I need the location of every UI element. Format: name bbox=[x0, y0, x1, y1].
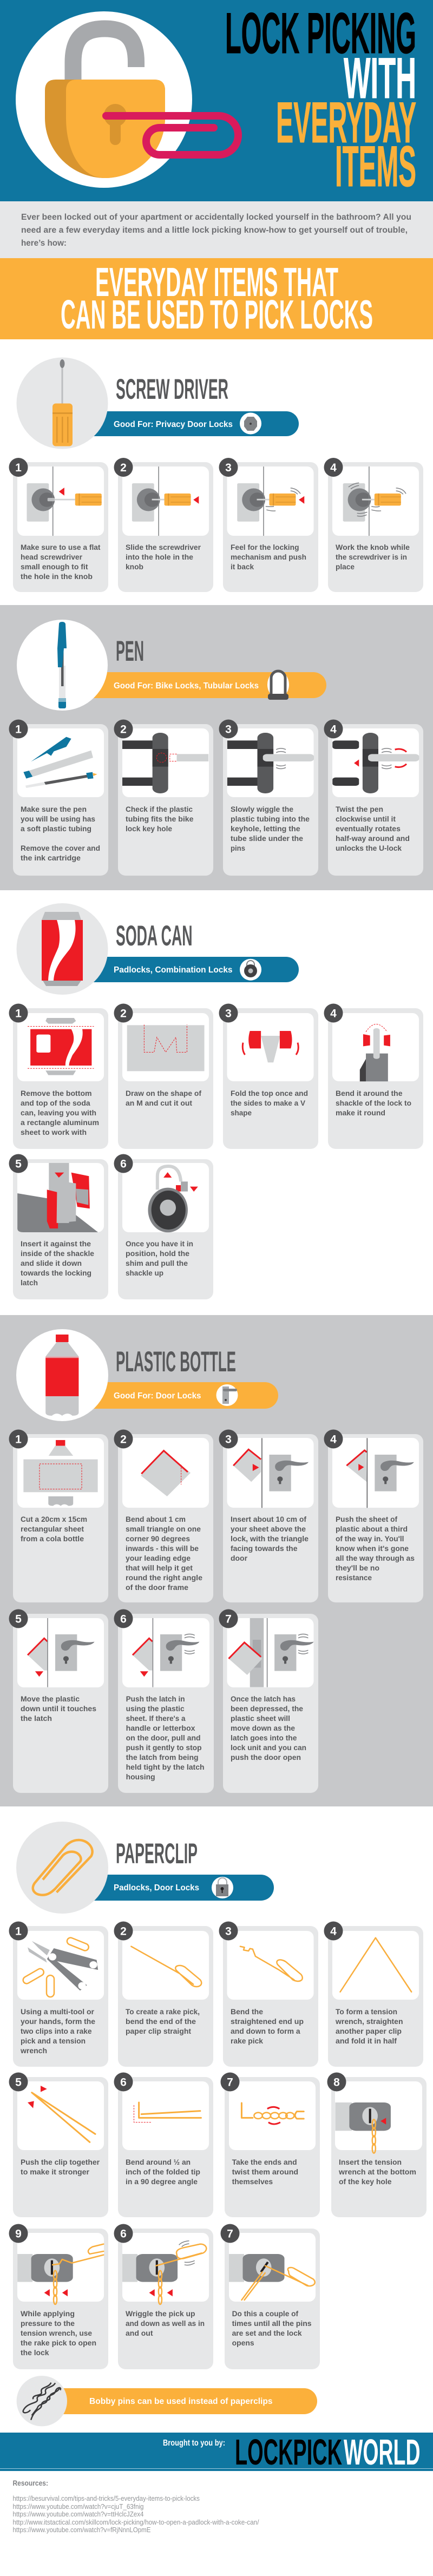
icon: plastic bottle bbox=[16, 1329, 108, 1421]
step 9 bbox=[9, 2224, 108, 2369]
step 5: to make it stronger bbox=[21, 2167, 90, 2176]
step 6: shim and pull the bbox=[126, 1259, 188, 1267]
step 4: shackle of the lock to bbox=[336, 1099, 411, 1107]
step 1: rectangular sheet bbox=[21, 1524, 84, 1533]
heading: SCREW DRIVER bbox=[116, 373, 228, 405]
step 3: Fold the top once and bbox=[231, 1089, 308, 1098]
step 2: paper clip straight bbox=[126, 2027, 191, 2035]
step 5 bbox=[9, 2073, 108, 2217]
good for pill: Good For: Bike Locks, Tubular Locks bbox=[114, 681, 259, 691]
step 1: 1 bbox=[15, 723, 22, 736]
step 3: your sheet above the bbox=[231, 1524, 306, 1533]
step 4 bbox=[324, 458, 423, 592]
step 1: Remove the cover and bbox=[21, 844, 100, 852]
step 3: shape bbox=[231, 1108, 252, 1117]
footer band bbox=[0, 2432, 433, 2473]
step 1 bbox=[9, 720, 108, 876]
step 4 bbox=[324, 1003, 423, 1149]
step 1: pick and a tension bbox=[21, 2036, 86, 2045]
step 11: opens bbox=[232, 2338, 254, 2347]
step 2: tubing fits the bike bbox=[126, 814, 194, 823]
step 7 bbox=[221, 2073, 320, 2217]
step 3 bbox=[219, 458, 318, 592]
step 2: Bend about 1 cm bbox=[126, 1515, 186, 1523]
step 2 bbox=[114, 458, 213, 592]
step 4: the screwdriver is in bbox=[336, 553, 407, 561]
good for pill bbox=[81, 671, 326, 700]
title bbox=[225, 1, 416, 199]
step 4: know when it's gone bbox=[336, 1544, 409, 1553]
step 10: and down as well as in bbox=[126, 2319, 205, 2328]
step 5: towards the locking bbox=[21, 1269, 91, 1277]
step 5: Move the plastic bbox=[21, 1694, 80, 1703]
resources: https://www.youtube.com/watch?v=ttHclcJZex4 bbox=[13, 2511, 144, 2518]
step 6: the latch from being bbox=[126, 1753, 199, 1762]
panel: pen bbox=[0, 605, 433, 890]
good for pill: Padlocks, Combination Locks bbox=[114, 965, 233, 975]
step 6: push it gently to stop bbox=[126, 1743, 202, 1752]
step 1 bbox=[9, 1003, 108, 1149]
step 1: can, leaving you with bbox=[21, 1108, 96, 1117]
logo: LOCKPICK bbox=[235, 2432, 342, 2473]
panel: screw driver bbox=[0, 339, 433, 605]
step 2: corner 90 degrees bbox=[126, 1534, 190, 1543]
step 4: Push the sheet of bbox=[336, 1515, 397, 1523]
step 7: themselves bbox=[232, 2177, 273, 2186]
step 6: sheet. If there's a bbox=[126, 1714, 186, 1723]
step 2: that will help it get bbox=[126, 1563, 193, 1572]
step 2: To create a rake pick, bbox=[126, 2007, 200, 2016]
step 6: 6 bbox=[120, 1158, 127, 1170]
step 1: and top of the soda bbox=[21, 1099, 90, 1107]
step 5 bbox=[9, 1609, 108, 1793]
step 6: 6 bbox=[120, 1613, 127, 1626]
step 5: latch bbox=[21, 1278, 38, 1287]
step 4: 4 bbox=[330, 723, 337, 736]
resources: https://www.youtube.com/watch?v=fRjNnnLOpmE bbox=[13, 2526, 150, 2534]
step 4: all the way through as bbox=[336, 1554, 415, 1562]
step 1: Remove the bottom bbox=[21, 1089, 92, 1098]
step 4: To form a tension bbox=[336, 2007, 397, 2016]
step 3: plastic tubing into the bbox=[231, 814, 310, 823]
step 3 bbox=[219, 1921, 318, 2067]
step 2: 2 bbox=[120, 723, 127, 736]
step 11: 7 bbox=[227, 2227, 233, 2240]
icon: pen bbox=[17, 620, 108, 711]
step 2 bbox=[114, 1003, 213, 1149]
step 2 bbox=[114, 1921, 213, 2067]
step 7: move down as the bbox=[231, 1724, 295, 1732]
icon: paperclip bbox=[16, 1822, 108, 1914]
step 5: 5 bbox=[15, 2076, 22, 2089]
step 3: mechanism and push bbox=[231, 553, 306, 561]
step 1: your hands, form the bbox=[21, 2017, 95, 2026]
step 7: push the door open bbox=[231, 1753, 301, 1762]
step 4: plastic about a third bbox=[336, 1524, 408, 1533]
step 2: an M and cut it out bbox=[126, 1099, 192, 1107]
step 1: a rectangle aluminum bbox=[21, 1118, 99, 1127]
step 7: Once the latch has bbox=[231, 1694, 296, 1703]
panel: plastic bottle bbox=[0, 1315, 433, 1806]
step 4: they'll be no bbox=[336, 1563, 379, 1572]
step 3: rake pick bbox=[231, 2036, 263, 2045]
step 3: 3 bbox=[225, 1433, 232, 1446]
step 5: down until it touches bbox=[21, 1704, 96, 1713]
step 4: resistance bbox=[336, 1573, 372, 1582]
step 5: Push the clip together bbox=[21, 2158, 100, 2166]
step 8: Insert the tension bbox=[339, 2158, 402, 2166]
step 1: 1 bbox=[15, 1433, 22, 1446]
step 3: Bend the bbox=[231, 2007, 263, 2016]
step 2: of the door frame bbox=[126, 1583, 188, 1592]
step 4: place bbox=[336, 562, 355, 571]
panel: paperclip bbox=[0, 1806, 433, 2433]
intro text: here’s how: bbox=[21, 239, 67, 248]
step 2: bend the end of the bbox=[126, 2017, 196, 2026]
step 1: the ink cartridge bbox=[21, 853, 81, 862]
step 1: 1 bbox=[15, 1008, 22, 1020]
step 6: held tight by the latch bbox=[126, 1763, 205, 1771]
step 9: the rake pick to open bbox=[21, 2338, 96, 2347]
step 4: 4 bbox=[330, 1433, 337, 1446]
step 5: 5 bbox=[15, 1158, 22, 1170]
step 1: small enough to fit bbox=[21, 562, 88, 571]
step 3: 3 bbox=[225, 462, 232, 474]
step 7: been depressed, the bbox=[231, 1704, 303, 1713]
step 8: of the key hole bbox=[339, 2177, 392, 2186]
step 3: facing towards the bbox=[231, 1544, 298, 1553]
step 2: Check if the plastic bbox=[126, 805, 193, 813]
step 1: Using a multi-tool or bbox=[21, 2007, 95, 2016]
intro text: need are a few everyday items and a little lock picking know-how to get yourself out of trouble, bbox=[21, 226, 408, 235]
step 1: Cut a 20cm x 15cm bbox=[21, 1515, 87, 1523]
step 3: keyhole, letting the bbox=[231, 824, 300, 833]
step 4: half-way around and bbox=[336, 834, 410, 843]
callout: bobby pins: Bobby pins can be used instead of paperclips bbox=[89, 2397, 273, 2406]
step 4 bbox=[324, 720, 423, 876]
step 1: head screwdriver bbox=[21, 553, 83, 561]
step 4 bbox=[324, 1921, 423, 2067]
step 1: Make sure the pen bbox=[21, 805, 87, 813]
step 9: the lock bbox=[21, 2348, 49, 2357]
step 7: twist them around bbox=[232, 2167, 298, 2176]
step 3: and down to form a bbox=[231, 2027, 300, 2035]
step 2: Draw on the shape of bbox=[126, 1089, 201, 1098]
step 10: 6 bbox=[120, 2227, 127, 2240]
step 2: lock key hole bbox=[126, 824, 172, 833]
step 1 bbox=[9, 1921, 108, 2067]
step 6: Bend around ½ an bbox=[126, 2158, 191, 2166]
step 7: plastic sheet will bbox=[231, 1714, 290, 1723]
step 5: 5 bbox=[15, 1613, 22, 1626]
step 6: housing bbox=[126, 1772, 155, 1781]
step 3: lock, with the triangle bbox=[231, 1534, 309, 1543]
step 8: wrench at the bottom bbox=[338, 2167, 416, 2176]
resources: https://besurvival.com/tips-and-tricks/5-everyday-items-to-pick-locks bbox=[13, 2495, 200, 2502]
step 11: are set and the lock bbox=[232, 2329, 302, 2337]
good for pill bbox=[81, 1875, 274, 1901]
step 2: round the right angle bbox=[126, 1573, 202, 1582]
step 7: latch goes into the bbox=[231, 1733, 297, 1742]
step 10: Wriggle the pick up bbox=[126, 2309, 195, 2318]
step 3: straightened end up bbox=[231, 2017, 304, 2026]
step 4: eventually rotates bbox=[336, 824, 401, 833]
step 6 bbox=[114, 2073, 213, 2217]
step 4: make it round bbox=[336, 1108, 385, 1117]
step 4: 4 bbox=[330, 462, 337, 474]
step 7: 7 bbox=[227, 2076, 233, 2089]
step 3: it back bbox=[231, 562, 254, 571]
step 4: 4 bbox=[330, 1008, 337, 1020]
step 7: lock unit and you can bbox=[231, 1743, 306, 1752]
step 2 bbox=[114, 1430, 213, 1602]
step 7: 7 bbox=[225, 1613, 232, 1626]
step 3 bbox=[219, 1003, 318, 1149]
step 1 bbox=[9, 458, 108, 592]
step 6: shackle up bbox=[126, 1269, 163, 1277]
good for pill bbox=[81, 957, 299, 982]
step 2: 2 bbox=[120, 1008, 127, 1020]
step 4: Work the knob while bbox=[336, 543, 410, 551]
subtitle banner bbox=[0, 258, 433, 339]
step 6: position, hold the bbox=[126, 1249, 189, 1258]
heading: PAPERCLIP bbox=[116, 1838, 198, 1870]
intro text bbox=[0, 201, 433, 258]
step 6 bbox=[114, 1154, 213, 1299]
step 3: Insert about 10 cm of bbox=[231, 1515, 306, 1523]
step 6 bbox=[114, 1609, 214, 1793]
step 3: tube slide under the bbox=[231, 834, 303, 843]
step 11 bbox=[221, 2224, 320, 2369]
good for pill: Padlocks, Door Locks bbox=[114, 1883, 199, 1892]
step 4: another paper clip bbox=[336, 2027, 402, 2035]
step 6: on the door, pull and bbox=[126, 1733, 201, 1742]
resources: https://www.youtube.com/watch?v=cjuT_63fnig bbox=[13, 2503, 144, 2511]
step 10: and out bbox=[126, 2329, 153, 2337]
step 3: 3 bbox=[225, 1008, 232, 1020]
step 1: Make sure to use a flat bbox=[21, 543, 101, 551]
callout: bobby pins bbox=[17, 2376, 317, 2426]
step 5: inside of the shackle bbox=[21, 1249, 94, 1258]
step 6: Once you have it in bbox=[126, 1239, 193, 1248]
step 2 bbox=[114, 720, 213, 876]
step 5 bbox=[9, 1154, 108, 1299]
step 8 bbox=[327, 2073, 427, 2217]
step 3 bbox=[219, 1430, 318, 1602]
step 4: Twist the pen bbox=[336, 805, 383, 813]
step 2: 2 bbox=[120, 462, 127, 474]
header band bbox=[0, 0, 433, 201]
good for pill: Good For: Door Locks bbox=[114, 1391, 201, 1401]
step 2: your leading edge bbox=[126, 1554, 191, 1562]
icon: soda can bbox=[16, 903, 108, 995]
step 5: Insert it against the bbox=[21, 1239, 91, 1248]
step 10 bbox=[114, 2224, 213, 2369]
step 3: Feel for the locking bbox=[231, 543, 299, 551]
icon: screwdriver bbox=[16, 357, 108, 449]
step 6: using the plastic bbox=[126, 1704, 185, 1713]
step 9: 9 bbox=[15, 2227, 22, 2240]
step 1 bbox=[9, 1430, 108, 1602]
step 9: While applying bbox=[21, 2309, 75, 2318]
intro text: Ever been locked out of your apartment or accidentally locked yourself in the bathroom? All you bbox=[21, 213, 411, 222]
step 3 bbox=[219, 720, 318, 876]
good for pill: Good For: Privacy Door Locks bbox=[114, 420, 233, 429]
step 1: 1 bbox=[15, 1926, 22, 1937]
step 2: 2 bbox=[120, 1433, 127, 1446]
step 4: of the way in. You'll bbox=[336, 1534, 404, 1543]
step 4: clockwise until it bbox=[336, 814, 396, 823]
step 7 bbox=[219, 1609, 318, 1793]
step 3: door bbox=[231, 1554, 248, 1562]
step 3: Slowly wiggle the bbox=[231, 805, 293, 813]
step 1: two clips into a rake bbox=[21, 2027, 92, 2035]
step 11: Do this a couple of bbox=[232, 2309, 298, 2318]
step 4: wrench, straighten bbox=[335, 2017, 403, 2026]
panel: soda can bbox=[0, 890, 433, 1315]
step 11: times until all the pins bbox=[232, 2319, 312, 2328]
good for pill bbox=[81, 411, 299, 436]
step 2: knob bbox=[126, 562, 143, 571]
step 3: 3 bbox=[225, 723, 232, 736]
step 4: unlocks the U-lock bbox=[336, 844, 402, 852]
step 2: 2 bbox=[120, 1926, 127, 1937]
step 4: and fold it in half bbox=[336, 2036, 397, 2045]
step 2: Slide the screwdriver bbox=[126, 543, 201, 551]
resources bbox=[13, 2479, 259, 2534]
step 3: the sides to make a V bbox=[231, 1099, 306, 1107]
step 8: 8 bbox=[333, 2076, 340, 2089]
step 6: inch of the folded tip bbox=[126, 2167, 200, 2176]
step 6: Push the latch in bbox=[126, 1694, 185, 1703]
footer band: Brought to you by: bbox=[163, 2439, 225, 2448]
panel: plastic bottle: PLASTIC BOTTLE bbox=[116, 1346, 236, 1378]
panel: pen: PEN bbox=[116, 635, 144, 667]
step 4: Bend it around the bbox=[336, 1089, 403, 1098]
step 1: you will be using has bbox=[21, 814, 95, 823]
step 3: 3 bbox=[225, 1926, 232, 1937]
step 1: sheet to work with bbox=[21, 1128, 87, 1136]
heading: SODA CAN bbox=[116, 920, 193, 952]
step 2: inwards - this will be bbox=[126, 1544, 199, 1553]
step 1: a soft plastic tubing bbox=[21, 824, 91, 833]
step 4 bbox=[324, 1430, 423, 1602]
step 2: small triangle on one bbox=[126, 1524, 201, 1533]
step 1: 1 bbox=[15, 462, 22, 474]
step 1: the hole in the knob bbox=[21, 572, 93, 581]
step 4: 4 bbox=[330, 1926, 337, 1937]
step 3: pins bbox=[231, 844, 245, 852]
step 5: the latch bbox=[21, 1714, 52, 1723]
step 6: in a 90 degree angle bbox=[126, 2177, 198, 2186]
step 1: from a cola bottle bbox=[21, 1534, 84, 1543]
step 6: handle or letterbox bbox=[126, 1724, 195, 1732]
step 2: into the hole in the bbox=[126, 553, 193, 561]
resources: Resources: bbox=[13, 2479, 48, 2487]
step 6: 6 bbox=[120, 2076, 127, 2089]
icon: padlock with paperclip bbox=[16, 11, 238, 188]
step 7: Take the ends and bbox=[232, 2158, 297, 2166]
step 1: wrench bbox=[20, 2046, 47, 2055]
step 9: tension wrench, use bbox=[21, 2329, 92, 2337]
step 9: pressure to the bbox=[21, 2319, 75, 2328]
step 5: and slide it down bbox=[21, 1259, 82, 1267]
good for pill bbox=[81, 1382, 278, 1409]
resources: http://www.itstactical.com/skillcom/lock-picking/how-to-open-a-padlock-with-a-coke-can/ bbox=[13, 2519, 259, 2526]
